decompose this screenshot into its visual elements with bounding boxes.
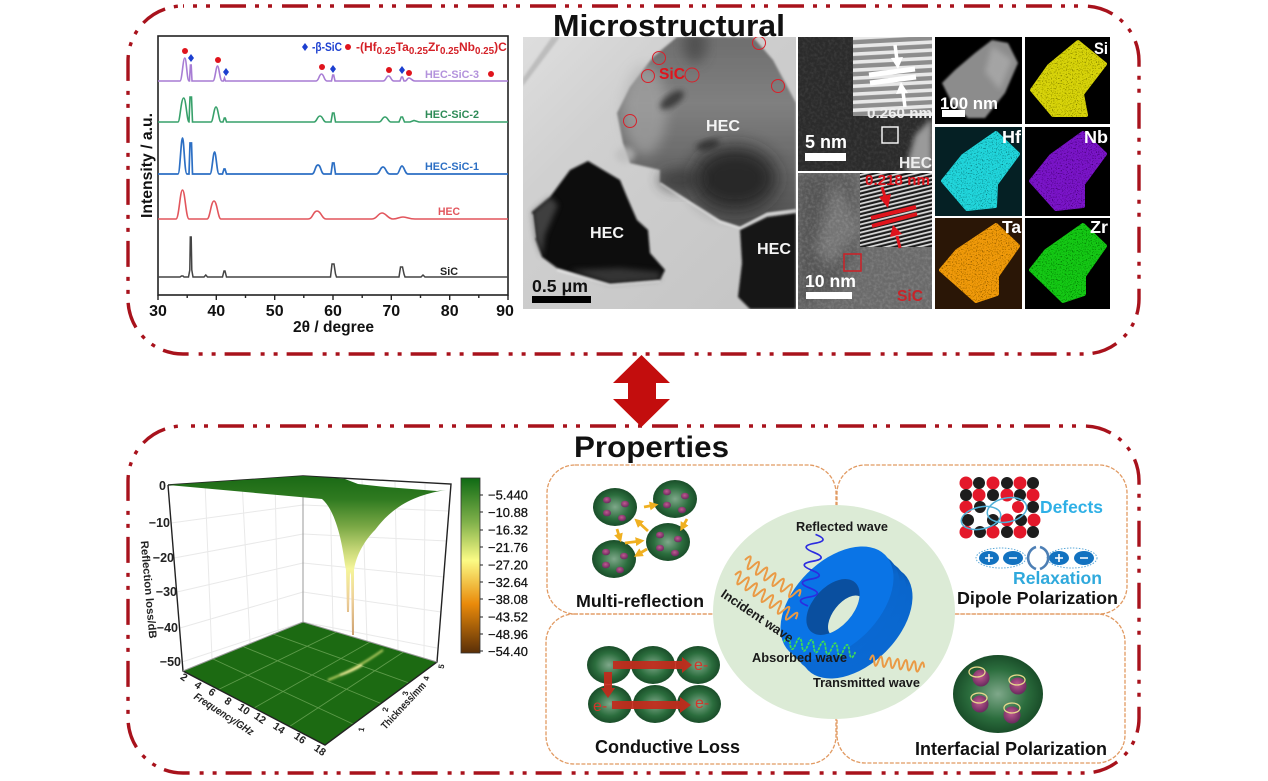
frequency tick labels: 16	[291, 730, 308, 747]
trace: HEC	[158, 190, 508, 219]
x axis labels: 30	[149, 303, 167, 320]
legend: Zr	[428, 40, 440, 54]
z axis labels: −40	[157, 621, 178, 635]
floor grid	[213, 632, 409, 726]
wave: absorbed	[783, 636, 856, 658]
chart: XRD patterns: HEC	[438, 206, 460, 218]
legend: 0.25	[377, 46, 396, 57]
icon: conducting spheres: e-	[694, 657, 708, 674]
arrow: double headed	[613, 355, 670, 427]
panel: Hf map: Hf	[1002, 127, 1021, 147]
panel: Nb map	[1025, 127, 1110, 216]
axes	[168, 476, 451, 745]
lower right particle	[738, 213, 796, 309]
particle rims	[532, 183, 796, 285]
x axis labels: 70	[382, 303, 400, 320]
frequency tick labels: 18	[311, 742, 328, 759]
wave labels	[718, 519, 920, 690]
heading: Microstructural: Microstructural	[553, 8, 785, 43]
colour bar	[461, 478, 480, 653]
trace: SiC	[158, 237, 508, 277]
thickness tick labels: 2	[381, 706, 390, 713]
x axis labels: 80	[441, 303, 459, 320]
colour bar ticks	[480, 495, 483, 651]
z axis labels: −30	[156, 585, 177, 599]
wave labels: Absorbed wave	[752, 650, 847, 665]
colour bar labels: −27.20	[488, 558, 528, 572]
y axis title: Intensity / a.u.	[139, 113, 156, 218]
panel: Conductive Loss	[546, 614, 836, 764]
plot frame	[158, 36, 508, 295]
lower left particle	[532, 161, 665, 284]
icon: interface sphere	[953, 655, 1043, 733]
surface	[168, 476, 446, 635]
selected area	[844, 254, 861, 271]
z axis labels: −20	[153, 551, 174, 565]
wave: transmitted	[869, 655, 925, 673]
frequency tick labels: 6	[206, 686, 218, 699]
icon: conducting spheres: e-	[695, 695, 709, 712]
label SiC: SiC	[897, 288, 923, 305]
label: Relaxation: Relaxation	[1013, 568, 1102, 588]
chart: XRD patterns: SiC	[440, 266, 458, 278]
scale bar: 10 nm	[805, 271, 856, 291]
legend: 0.25	[475, 46, 495, 57]
thickness axis title: Thickness/mm	[379, 680, 429, 732]
panel: properties frame	[128, 426, 1139, 773]
legend: -(Hf	[356, 40, 377, 54]
frequency axis title: Frequency/GHz	[191, 691, 256, 739]
frequency tick labels: 10	[235, 701, 252, 718]
chart: 3D reflection loss surface	[138, 476, 528, 759]
colour bar labels: −16.32	[488, 522, 528, 538]
panel: Zr map: Zr	[1090, 217, 1108, 237]
thickness tick labels: 5	[437, 663, 446, 670]
floor hot spot	[328, 650, 383, 680]
thickness tick labels: 3	[401, 690, 410, 697]
panel: Nb map: Nb	[1084, 127, 1108, 147]
wall grid	[171, 478, 449, 662]
trace: HEC-SiC-2	[158, 97, 508, 122]
label: Dipole Polarization	[957, 588, 1118, 608]
icon: conducting spheres	[587, 646, 721, 723]
labels HEC	[590, 118, 791, 258]
legend: Nb	[459, 40, 475, 54]
label: Conductive Loss	[595, 737, 740, 757]
panel: Interfacial Polarization	[837, 614, 1125, 763]
frequency tick labels: 14	[270, 720, 287, 737]
selected area	[882, 127, 898, 143]
frequency tick labels: 4	[192, 679, 204, 692]
x axis labels	[149, 303, 514, 320]
z axis labels: −50	[160, 655, 181, 669]
x axis labels: 50	[266, 303, 284, 320]
trace: HEC-SiC-3	[158, 58, 508, 81]
wave labels: Transmitted wave	[813, 675, 920, 690]
colour bar labels: −10.88	[488, 505, 528, 520]
colour bar labels: −21.76	[488, 540, 528, 555]
x axis labels: 60	[324, 303, 342, 320]
floor	[183, 622, 437, 745]
thickness tick labels	[357, 663, 446, 733]
panel: Multi-reflection	[547, 465, 836, 614]
panel: Ta map: Ta	[1002, 217, 1021, 237]
lattice markers	[869, 45, 916, 107]
panel: STEM image	[935, 37, 1022, 124]
colour bar labels: −32.64	[488, 575, 528, 590]
panel: STEM image: 100 nm	[940, 94, 998, 113]
panel: HRTEM upper	[798, 37, 932, 172]
z axis labels: −10	[149, 516, 170, 530]
scale bar: 5 nm	[805, 132, 847, 152]
scale bar: 0.5 μm	[532, 276, 588, 296]
colour bar labels: −5.440	[488, 488, 528, 502]
thickness tick labels: 4	[422, 675, 431, 682]
trace: HEC-SiC-1	[158, 138, 508, 174]
colour bar labels: −43.52	[488, 610, 528, 624]
lattice markers	[871, 187, 917, 248]
legend: )C	[494, 40, 507, 54]
labels HEC: HEC	[757, 241, 791, 258]
label spacing: 0.260 nm	[867, 105, 932, 122]
wave: reflected	[800, 534, 823, 607]
x axis labels: 90	[496, 303, 514, 320]
x axis labels: 40	[207, 303, 225, 320]
colour bar labels	[488, 488, 528, 659]
colour bar labels: −38.08	[488, 592, 528, 607]
panel: Hf map	[935, 127, 1022, 216]
label SiC: SiC	[659, 66, 685, 83]
panel: microstructural frame	[128, 6, 1139, 354]
label spacing: 0.218 nm	[865, 172, 930, 189]
panel: Dipole Polarization	[837, 465, 1127, 614]
z axis labels	[149, 479, 181, 669]
chart: XRD patterns: HEC-SiC-2	[425, 109, 479, 121]
labels HEC: HEC	[706, 118, 740, 135]
panel: TEM image	[523, 27, 796, 309]
legend: Ta	[396, 40, 409, 54]
chart: XRD patterns	[139, 36, 514, 336]
x axis title: 2θ / degree	[293, 319, 374, 336]
label: Multi-reflection	[576, 591, 704, 611]
wave: incident	[731, 555, 802, 624]
frequency tick labels: 12	[251, 710, 268, 727]
SiC circles	[624, 36, 784, 128]
labels HEC: HEC	[590, 225, 624, 242]
panel: Si map	[1025, 37, 1110, 124]
chart: XRD patterns: HEC-SiC-1	[425, 161, 479, 173]
axis ticks	[158, 295, 508, 300]
colour bar labels: −54.40	[488, 644, 528, 659]
legend: -β-SiC	[312, 40, 342, 54]
z axis labels: 0	[159, 479, 166, 493]
icon: defect lattice	[959, 476, 1040, 538]
legend	[312, 40, 507, 57]
panel: Ta map	[935, 217, 1022, 309]
panel: HRTEM lower	[798, 172, 932, 309]
icon: relaxing dipoles	[976, 547, 1097, 569]
label: Defects: Defects	[1040, 497, 1103, 517]
icon: blue ring	[780, 546, 912, 678]
icon: sphere cluster	[592, 480, 697, 578]
frequency tick labels: 8	[222, 695, 234, 708]
colour bar labels: −48.96	[488, 627, 528, 642]
large particle	[617, 37, 796, 227]
panel: Si map: Si	[1094, 39, 1108, 58]
panel: Zr map	[1025, 217, 1110, 309]
heading: Properties: Properties	[574, 431, 729, 464]
legend: 0.25	[440, 46, 460, 57]
legend: 0.25	[409, 46, 428, 57]
wave labels: Reflected wave	[796, 519, 888, 534]
label HEC: HEC	[899, 155, 932, 172]
peak markers	[182, 48, 494, 77]
thickness tick labels: 1	[357, 726, 366, 733]
wave labels: Incident wave	[718, 586, 796, 645]
z axis title: Reflection loss/dB	[138, 540, 158, 639]
series labels: HEC-SiC-3	[425, 69, 479, 81]
icon: conducting spheres: e-	[593, 698, 607, 715]
central circle: wave absorption	[713, 505, 955, 719]
frequency tick labels	[178, 671, 328, 759]
frequency tick labels: 2	[178, 671, 190, 684]
diamond markers	[188, 43, 405, 76]
label: Interfacial Polarization	[915, 739, 1107, 759]
